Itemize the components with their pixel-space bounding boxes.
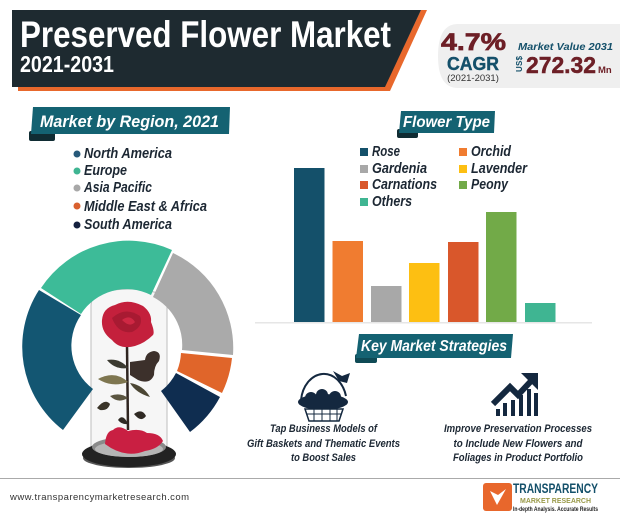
title banner bbox=[12, 10, 427, 91]
text: preservation strategy: Improve Preservation Processes bbox=[444, 423, 592, 435]
legend: flower types: Peony bbox=[471, 177, 509, 193]
legend: regions bbox=[74, 146, 207, 233]
legend: regions: Asia Pacific bbox=[83, 180, 152, 196]
legend: flower types: Gardenia bbox=[372, 161, 427, 177]
text: preservation strategy: to Include New Flowers and bbox=[454, 438, 583, 450]
cagr value: 4.7% bbox=[441, 29, 506, 56]
icon: gift basket bbox=[298, 371, 350, 421]
rose bloom bbox=[102, 302, 154, 347]
heading: flower type: Flower Type bbox=[403, 114, 490, 131]
legend: flower types: Carnations bbox=[372, 177, 437, 193]
text: preservation strategy: Foliages in Product Portfolio bbox=[453, 452, 583, 464]
text: preservation strategy bbox=[444, 423, 592, 464]
logo bbox=[483, 481, 598, 513]
heading: flower type bbox=[397, 111, 495, 138]
market value: 272.32 bbox=[526, 52, 596, 78]
market value unit: US$ bbox=[515, 55, 524, 72]
cagr label: CAGR bbox=[447, 54, 499, 74]
cagr period: (2021-2031) bbox=[447, 73, 499, 84]
donut chart bbox=[22, 241, 233, 432]
text: basket strategy: Tap Business Models of bbox=[270, 423, 378, 435]
icon: growth chart arrow bbox=[493, 373, 538, 416]
market value suffix: Mn bbox=[598, 65, 612, 76]
bar chart bbox=[255, 168, 592, 324]
title: Preserved Flower Market bbox=[20, 14, 391, 55]
petals on base bbox=[105, 427, 163, 454]
legend: regions: North America bbox=[84, 146, 172, 162]
heading: key market strategies: Key Market Strategies bbox=[361, 338, 507, 355]
text: basket strategy bbox=[247, 423, 400, 464]
market value label: Market Value 2031 bbox=[518, 41, 613, 53]
heading: key market strategies bbox=[355, 334, 513, 363]
preserved rose on base bbox=[82, 302, 176, 468]
stat panel bbox=[438, 24, 620, 88]
logo subname: MARKET RESEARCH bbox=[520, 496, 591, 505]
subtitle years: 2021-2031 bbox=[20, 51, 114, 77]
website url: www.transparencymarketresearch.com bbox=[9, 492, 189, 503]
leaves bbox=[107, 360, 128, 368]
legend: flower types: Rose bbox=[372, 144, 400, 160]
base bbox=[83, 448, 175, 468]
text: basket strategy: Gift Baskets and Thematic Events bbox=[247, 438, 400, 450]
icon: logo mark bbox=[490, 489, 506, 505]
legend: regions: South America bbox=[84, 217, 172, 233]
glass dome bbox=[91, 289, 167, 446]
legend: flower types: Orchid bbox=[471, 144, 512, 160]
heading: market by region bbox=[29, 107, 230, 141]
heading: market by region: Market by Region, 2021 bbox=[40, 112, 219, 131]
legend: regions: Europe bbox=[84, 163, 127, 179]
legend: flower types bbox=[360, 144, 528, 210]
text: basket strategy: to Boost Sales bbox=[291, 452, 356, 464]
legend: regions: Middle East & Africa bbox=[84, 199, 207, 215]
legend: flower types: Others bbox=[372, 194, 412, 210]
legend: flower types: Lavender bbox=[471, 161, 528, 177]
stem bbox=[127, 345, 128, 430]
